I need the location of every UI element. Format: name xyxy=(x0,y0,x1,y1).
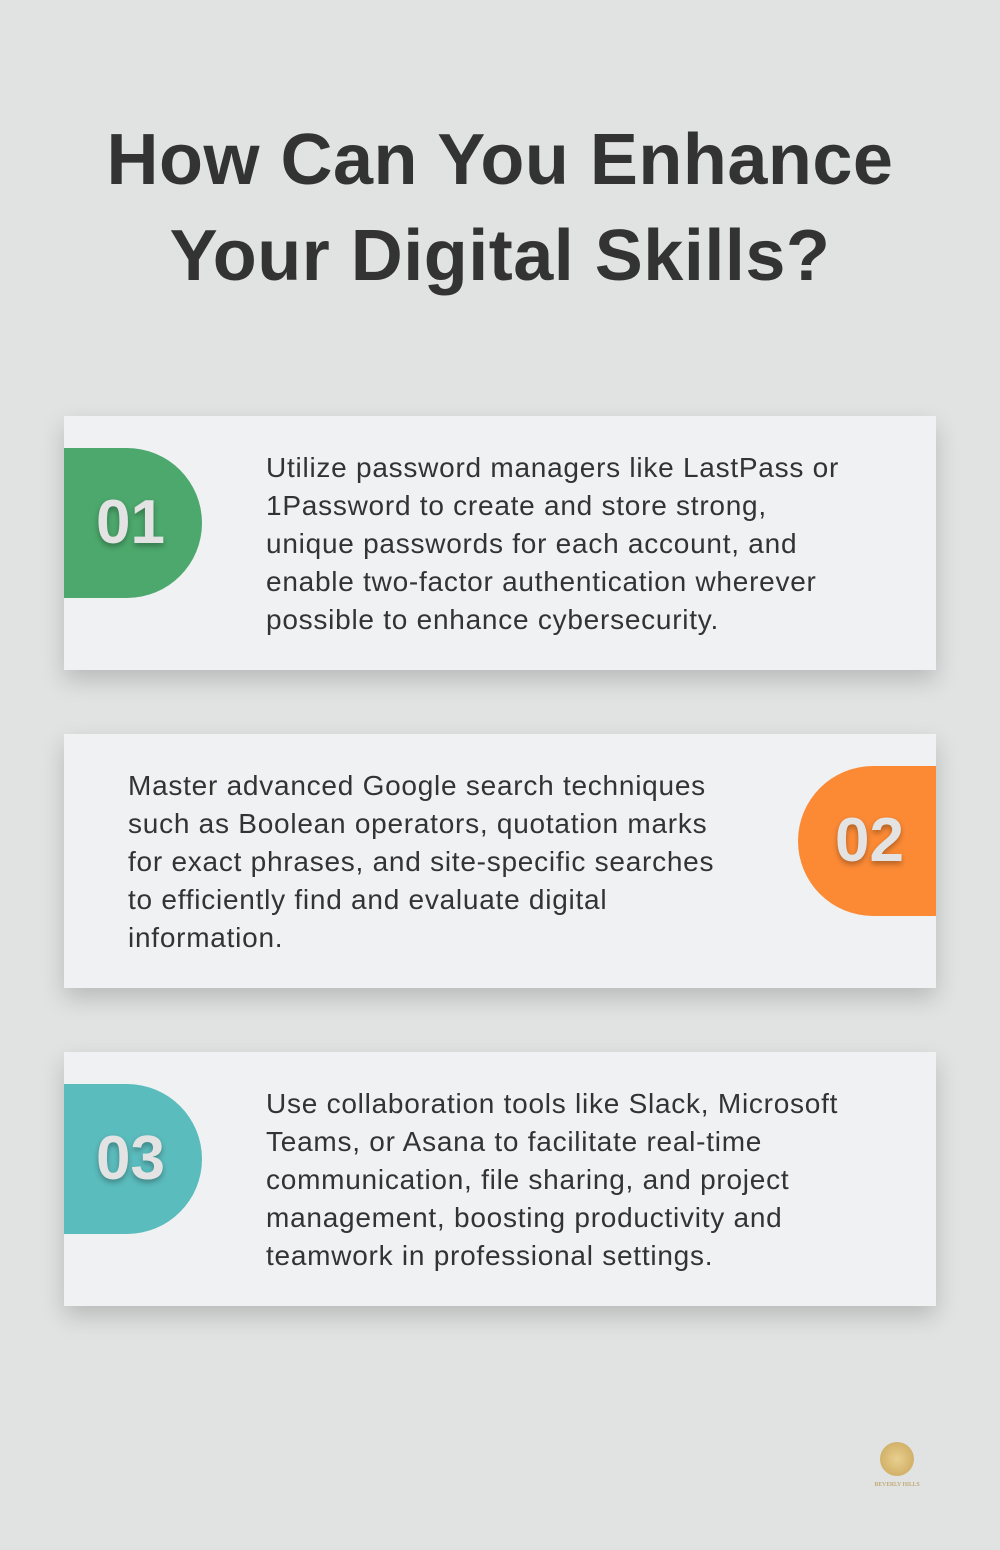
text 01: unique passwords for each account, and xyxy=(266,528,797,559)
title: How Can You Enhance xyxy=(107,120,893,200)
text 03: teamwork in professional settings. xyxy=(266,1240,713,1271)
panel: step 01 xyxy=(64,416,936,670)
text 02: for exact phrases, and site-specific searches xyxy=(128,846,714,877)
text 01: 1Password to create and store strong, xyxy=(266,490,767,521)
text 02: information. xyxy=(128,922,283,953)
badge 01 xyxy=(64,448,202,598)
badge 02 xyxy=(798,766,936,916)
text 01: enable two-factor authentication wherever xyxy=(266,566,817,597)
text 03: communication, file sharing, and project xyxy=(266,1164,789,1195)
panel: step 02 xyxy=(64,734,936,988)
badge 01: 01 xyxy=(96,488,165,557)
text 02: such as Boolean operators, quotation marks xyxy=(128,808,707,839)
badge 02: 02 xyxy=(835,806,904,875)
badge 03 xyxy=(64,1084,202,1234)
text 02: to efficiently find and evaluate digital xyxy=(128,884,607,915)
text 02 xyxy=(128,770,714,953)
logo: BEVERLY HILLS xyxy=(874,1482,920,1488)
text 03: Teams, or Asana to facilitate real-time xyxy=(266,1126,762,1157)
text 01: Utilize password managers like LastPass or xyxy=(266,452,839,483)
text 03 xyxy=(266,1088,838,1271)
badge 03: 03 xyxy=(96,1124,165,1193)
panel: step 03 xyxy=(64,1052,936,1306)
text 03: management, boosting productivity and xyxy=(266,1202,782,1233)
text 03: Use collaboration tools like Slack, Microsoft xyxy=(266,1088,838,1119)
title: Your Digital Skills? xyxy=(170,216,830,296)
title xyxy=(107,120,893,296)
text 02: Master advanced Google search techniques xyxy=(128,770,706,801)
text 01 xyxy=(266,452,839,635)
logo xyxy=(874,1442,920,1488)
text 01: possible to enhance cybersecurity. xyxy=(266,604,719,635)
